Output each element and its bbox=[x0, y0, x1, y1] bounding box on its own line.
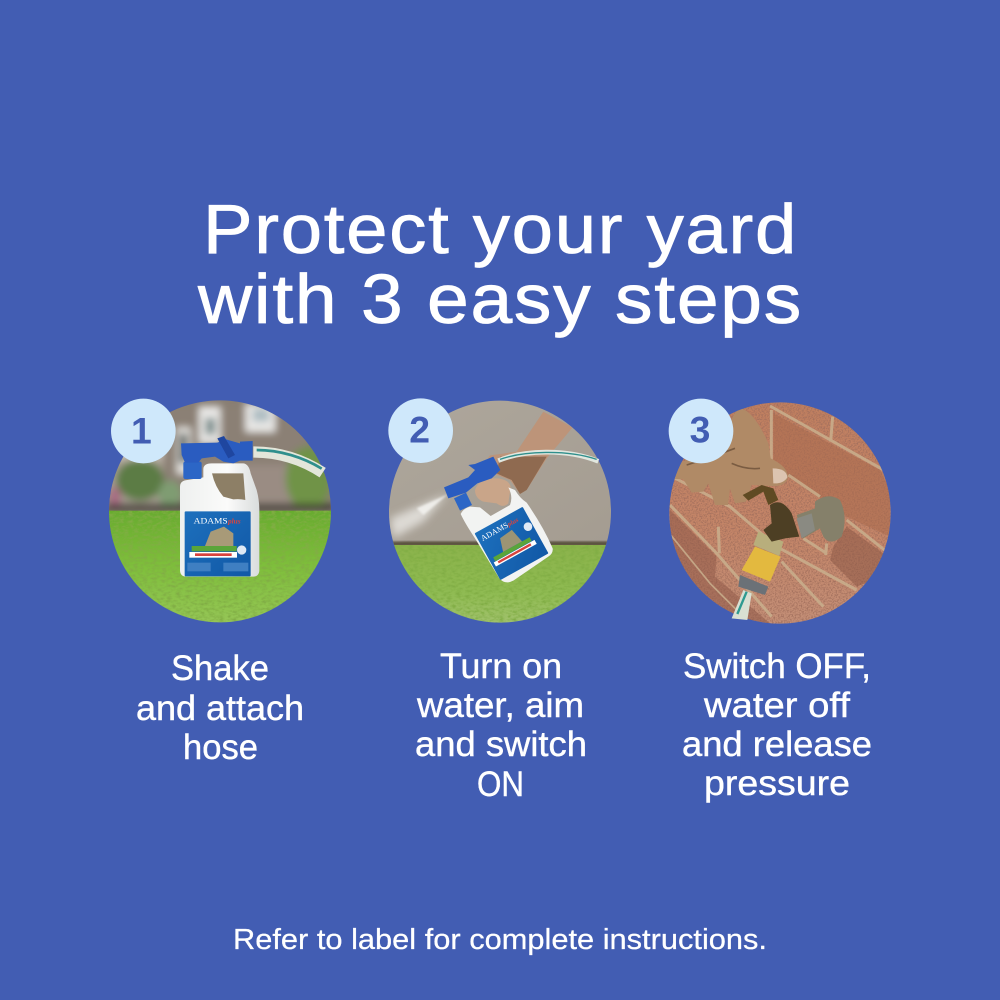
label: plus bbox=[227, 516, 241, 525]
badge: number 2: 2 bbox=[409, 409, 430, 451]
caption: step 3: water off bbox=[703, 686, 850, 725]
badge: number 3 bbox=[669, 399, 733, 463]
panel: step 3 bbox=[667, 399, 893, 627]
caption: step 1: and attach bbox=[136, 689, 304, 728]
caption: step 1: hose bbox=[183, 728, 258, 767]
hose bbox=[253, 450, 323, 473]
sprayer head bbox=[181, 436, 253, 479]
photo: hand on tap against a brick wall bbox=[667, 400, 893, 627]
label bbox=[185, 511, 251, 576]
hose bbox=[498, 452, 598, 461]
label: plus bbox=[506, 516, 520, 529]
caption: step 3 bbox=[682, 647, 872, 803]
caption: step 2: ON bbox=[477, 765, 524, 804]
caption: step 3: pressure bbox=[704, 764, 850, 803]
spray mist bbox=[390, 493, 448, 538]
icon: tilted bottle bbox=[461, 487, 553, 582]
photo: bottle with hose on a lawn bbox=[107, 397, 333, 624]
sprayer head bbox=[444, 457, 500, 511]
badge: number 3: 3 bbox=[690, 409, 710, 451]
label bbox=[475, 507, 548, 580]
footnote: Refer to label for complete instructions. bbox=[233, 924, 767, 956]
arm and hand bbox=[475, 412, 573, 506]
title: with 3 easy steps bbox=[197, 260, 803, 338]
panel: step 1 bbox=[107, 397, 333, 624]
caption: step 2: Turn on bbox=[440, 647, 562, 686]
label: ADAMS bbox=[479, 520, 510, 543]
caption: step 3: Switch OFF, bbox=[683, 647, 871, 686]
title bbox=[197, 190, 803, 338]
panel: step 2 bbox=[387, 397, 613, 625]
icon: bottle bbox=[180, 436, 259, 577]
icon: brass tap and hose connector bbox=[732, 485, 845, 620]
dark brick shading bbox=[670, 413, 890, 623]
label: ADAMS bbox=[194, 515, 228, 525]
badge: number 2 bbox=[388, 398, 453, 463]
caption: step 1: Shake bbox=[171, 649, 269, 688]
caption: step 2: water, aim bbox=[416, 686, 584, 725]
photo: hand spraying the lawn bbox=[387, 397, 613, 625]
caption: step 2: and switch bbox=[415, 725, 587, 764]
badge: number 1 bbox=[111, 399, 176, 463]
title: Protect your yard bbox=[203, 190, 798, 268]
badge: number 1: 1 bbox=[131, 409, 152, 451]
mortar lines bbox=[667, 406, 887, 617]
caption: step 3: and release bbox=[682, 725, 872, 764]
hand bbox=[667, 408, 788, 505]
caption: step 2 bbox=[415, 647, 587, 804]
caption: step 1 bbox=[136, 649, 304, 767]
